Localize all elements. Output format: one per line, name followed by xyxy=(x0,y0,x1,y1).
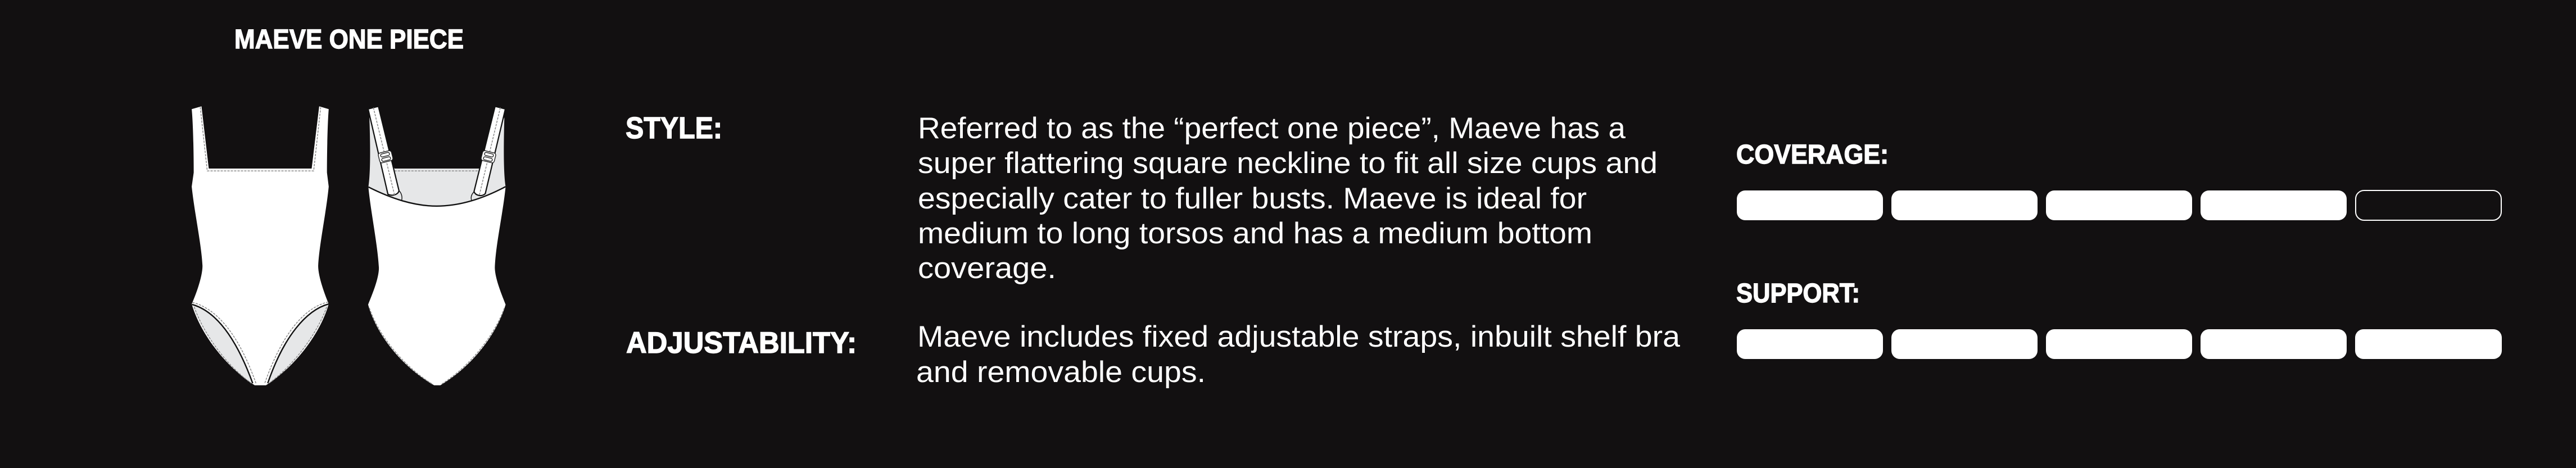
strap stitching xyxy=(373,107,395,196)
icon: swimsuit back view xyxy=(368,106,506,385)
coverage label: COVERAGE: xyxy=(1736,140,1889,170)
support rating bar: 5 of 5 xyxy=(1737,329,2502,359)
back neckline stitching xyxy=(395,170,479,171)
top band seam xyxy=(368,187,506,206)
adjustability label: ADJUSTABILITY: xyxy=(626,326,857,360)
right leg lining xyxy=(268,305,328,383)
style description xyxy=(918,112,1658,285)
style description: coverage. xyxy=(918,252,1056,285)
left strap xyxy=(368,106,399,195)
icon: swimsuit front view xyxy=(192,106,329,385)
left buckle xyxy=(378,150,393,163)
D-rings xyxy=(399,190,474,201)
style description: especially cater to fuller busts. Maeve is ideal for xyxy=(918,182,1587,215)
adjustability description xyxy=(916,320,1681,389)
back leg stitching xyxy=(369,308,433,384)
right strap xyxy=(474,106,505,196)
leg seams xyxy=(192,302,329,383)
body xyxy=(368,187,506,385)
style description: Referred to as the “perfect one piece”, Maeve has a xyxy=(918,112,1626,145)
front silhouette xyxy=(192,106,329,385)
style description: super flattering square neckline to fit all size cups and xyxy=(918,147,1658,180)
title: MAEVE ONE PIECE xyxy=(234,25,464,54)
adjustability description: and removable cups. xyxy=(916,356,1206,389)
right buckle xyxy=(481,150,496,163)
left leg lining xyxy=(192,305,253,383)
neckline stitching xyxy=(200,107,321,171)
inner lining xyxy=(368,117,506,206)
adjustability description: Maeve includes fixed adjustable straps, inbuilt shelf bra xyxy=(917,320,1681,353)
support label: SUPPORT: xyxy=(1736,279,1860,308)
style description: medium to long torsos and has a medium bottom xyxy=(918,217,1592,250)
coverage rating bar: 4 of 5 xyxy=(1737,190,2501,220)
style label: STYLE: xyxy=(626,111,722,145)
